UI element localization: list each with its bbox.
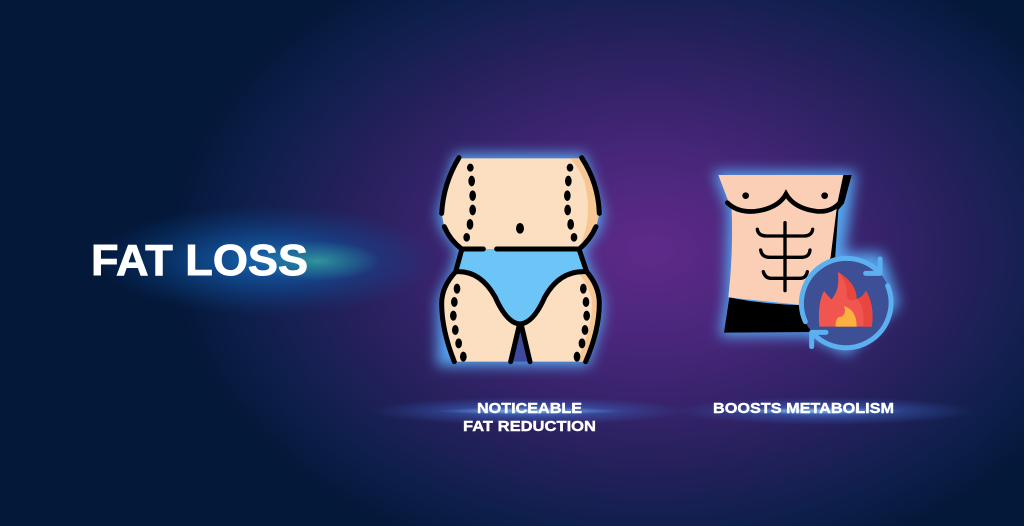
outlines bbox=[442, 158, 599, 362]
icon glow bbox=[442, 158, 599, 362]
glow bars under labels bbox=[370, 397, 975, 425]
right thigh shade bbox=[577, 273, 599, 362]
briefs bbox=[455, 249, 587, 324]
chest line bbox=[727, 194, 843, 211]
shorts bbox=[724, 297, 813, 333]
label: noticeable fat reduction bbox=[463, 400, 596, 435]
flame bbox=[819, 272, 873, 327]
torso shade bbox=[570, 158, 599, 249]
label: noticeable fat reduction: NOTICEABLE bbox=[477, 400, 582, 417]
torso skin bbox=[718, 175, 843, 307]
nipples bbox=[742, 192, 749, 199]
flame shade bbox=[838, 272, 873, 327]
metabolism disc bbox=[801, 258, 891, 348]
ab lines bbox=[757, 223, 813, 291]
dotted marks bbox=[450, 164, 590, 362]
icon: abdominal muscles with metabolism flame bbox=[718, 175, 895, 351]
left thigh bbox=[442, 272, 519, 362]
label: boosts metabolism: BOOSTS METABOLISM bbox=[713, 400, 894, 417]
crotch gap bbox=[513, 328, 527, 362]
icon glow bbox=[718, 175, 895, 351]
torso dark side bbox=[810, 175, 852, 300]
label: noticeable fat reduction: FAT REDUCTION bbox=[463, 418, 596, 435]
cycle arrows bbox=[801, 258, 891, 348]
right thigh bbox=[521, 272, 599, 362]
torso skin bbox=[442, 158, 599, 249]
flame core bbox=[836, 306, 857, 327]
glow behind title bbox=[96, 205, 440, 315]
title: FAT LOSS bbox=[91, 236, 308, 285]
icon: waist and hips with dotted marks bbox=[442, 158, 599, 362]
